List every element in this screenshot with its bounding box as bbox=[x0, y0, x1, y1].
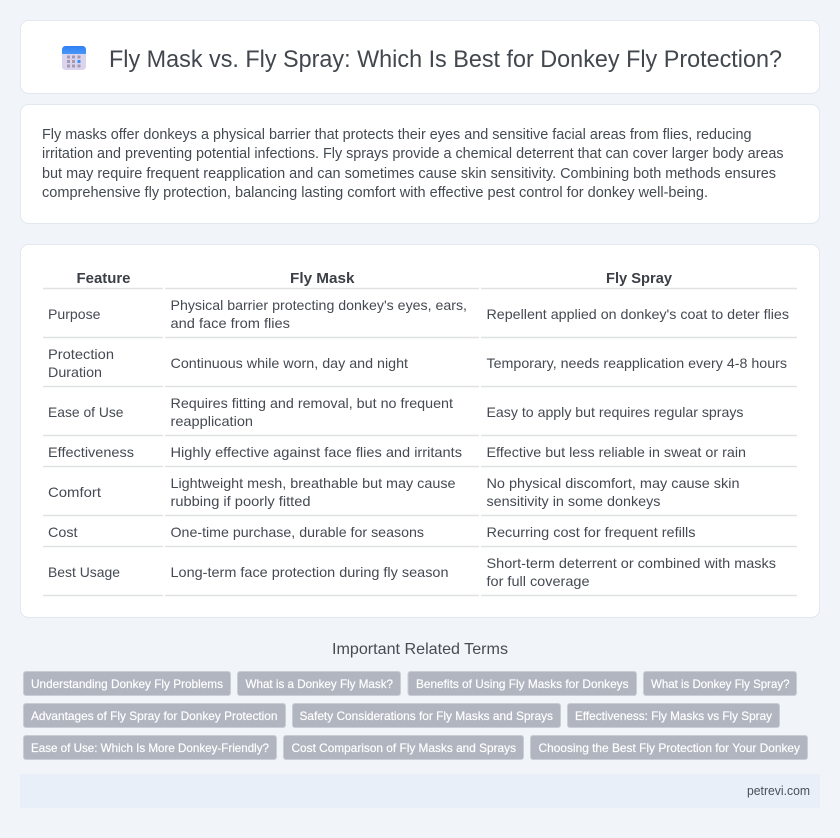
row: protection duration: Continuous while worn, day and night bbox=[170, 355, 408, 371]
tag: cost comparison: Cost Comparison of Fly Masks and Sprays bbox=[292, 741, 516, 755]
tag: ease of use bbox=[24, 736, 276, 760]
row: cost bbox=[48, 524, 696, 540]
row: comfort: No physical discomfort, may cause skin bbox=[486, 475, 740, 491]
tag: choosing the best fly protection bbox=[530, 736, 808, 760]
row: ease of use: reapplication bbox=[170, 413, 253, 429]
row: purpose bbox=[48, 297, 789, 331]
row: best usage: Best Usage bbox=[48, 564, 120, 580]
intro paragraph: but may require frequent reapplication and can sometimes cause skin sensitivity. Combining both methods ensures bbox=[42, 166, 776, 182]
row: protection duration bbox=[48, 346, 787, 380]
row: cost: One-time purchase, durable for seasons bbox=[170, 524, 424, 540]
row: comfort: sensitivity in some donkeys bbox=[486, 493, 660, 509]
row: purpose: and face from flies bbox=[170, 315, 290, 331]
tag: what is donkey fly spray bbox=[644, 672, 796, 696]
row: purpose: Physical barrier protecting donkey's eyes, ears, bbox=[170, 297, 467, 313]
tag: benefits of using fly masks bbox=[408, 672, 636, 696]
tag: what is donkey fly spray: What is Donkey Fly Spray? bbox=[651, 677, 790, 691]
tag: benefits of using fly masks: Benefits of Using Fly Masks for Donkeys bbox=[416, 677, 628, 691]
intro paragraph bbox=[42, 127, 784, 201]
tag: what is a donkey fly mask: What is a Donkey Fly Mask? bbox=[246, 677, 393, 691]
tag: cost comparison bbox=[284, 736, 524, 760]
panel: title header bbox=[20, 20, 820, 94]
row: protection duration: Duration bbox=[48, 364, 102, 380]
row: effectiveness: Effectiveness bbox=[48, 444, 134, 460]
tag: effectiveness: Effectiveness: Fly Masks vs Fly Spray bbox=[575, 709, 772, 723]
related term tags bbox=[24, 672, 808, 760]
row: effectiveness bbox=[48, 444, 746, 460]
row: ease of use: Requires fitting and removal, but no frequent bbox=[170, 395, 453, 411]
row: effectiveness: Highly effective against face flies and irritants bbox=[170, 444, 462, 460]
tag: advantages of fly spray: Advantages of Fly Spray for Donkey Protection bbox=[31, 709, 278, 723]
tag: ease of use: Ease of Use: Which Is More Donkey-Friendly? bbox=[31, 741, 269, 755]
tag: effectiveness bbox=[568, 704, 780, 728]
tag: advantages of fly spray bbox=[24, 704, 286, 728]
row: ease of use: Ease of Use bbox=[48, 404, 124, 420]
row: purpose: Repellent applied on donkey's coat to deter flies bbox=[486, 306, 789, 322]
row: protection duration: Protection bbox=[48, 346, 114, 362]
title: Fly Mask vs. Fly Spray: Which Is Best for Donkey Fly Protection? bbox=[109, 46, 782, 73]
row: comfort: Comfort bbox=[48, 484, 101, 500]
tag: choosing the best fly protection: Choosing the Best Fly Protection for Your Donkey bbox=[538, 741, 800, 755]
panel: introduction bbox=[20, 104, 820, 224]
row: best usage: Long-term face protection during fly season bbox=[170, 564, 448, 580]
row: effectiveness: Effective but less reliable in sweat or rain bbox=[486, 444, 746, 460]
intro paragraph: irritation and preventing potential infections. Fly sprays provide a chemical deterrent that can cover larger body areas bbox=[42, 146, 784, 162]
tag: what is a donkey fly mask bbox=[238, 672, 400, 696]
row: best usage bbox=[48, 555, 776, 589]
icon: calendar bbox=[62, 46, 86, 70]
row: comfort: rubbing if poorly fitted bbox=[170, 493, 310, 509]
tag: understanding donkey fly problems bbox=[24, 672, 230, 696]
row: best usage: for full coverage bbox=[486, 573, 590, 589]
row: comfort bbox=[48, 475, 740, 509]
footer bbox=[20, 774, 820, 808]
row: ease of use bbox=[48, 395, 744, 429]
row: protection duration: Temporary, needs reapplication every 4-8 hours bbox=[486, 355, 787, 371]
panel: comparison table bbox=[20, 244, 820, 618]
table header row: Feature bbox=[76, 270, 130, 287]
intro paragraph: comprehensive fly protection, balancing lasting comfort with effective pest control for donkey well-being. bbox=[42, 185, 708, 201]
tag: safety considerations: Safety Considerations for Fly Masks and Sprays bbox=[300, 709, 553, 723]
row: cost: Cost bbox=[48, 524, 78, 540]
row: cost: Recurring cost for frequent refills bbox=[486, 524, 696, 540]
footer site name: petrevi.com bbox=[747, 784, 810, 798]
heading: important related terms: Important Related Terms bbox=[332, 641, 508, 658]
row: purpose: Purpose bbox=[48, 306, 101, 322]
row: comfort: Lightweight mesh, breathable but may cause bbox=[170, 475, 456, 491]
table header row: Fly Spray bbox=[606, 270, 673, 287]
table header row: Fly Mask bbox=[290, 270, 355, 287]
table header row bbox=[76, 270, 673, 287]
row: ease of use: Easy to apply but requires regular sprays bbox=[486, 404, 744, 420]
tag: safety considerations bbox=[292, 704, 560, 728]
row: best usage: Short-term deterrent or combined with masks bbox=[486, 555, 776, 571]
intro paragraph: Fly masks offer donkeys a physical barrier that protects their eyes and sensitive facial areas from flies, reducing bbox=[42, 127, 752, 143]
tag: understanding donkey fly problems: Understanding Donkey Fly Problems bbox=[31, 677, 223, 691]
